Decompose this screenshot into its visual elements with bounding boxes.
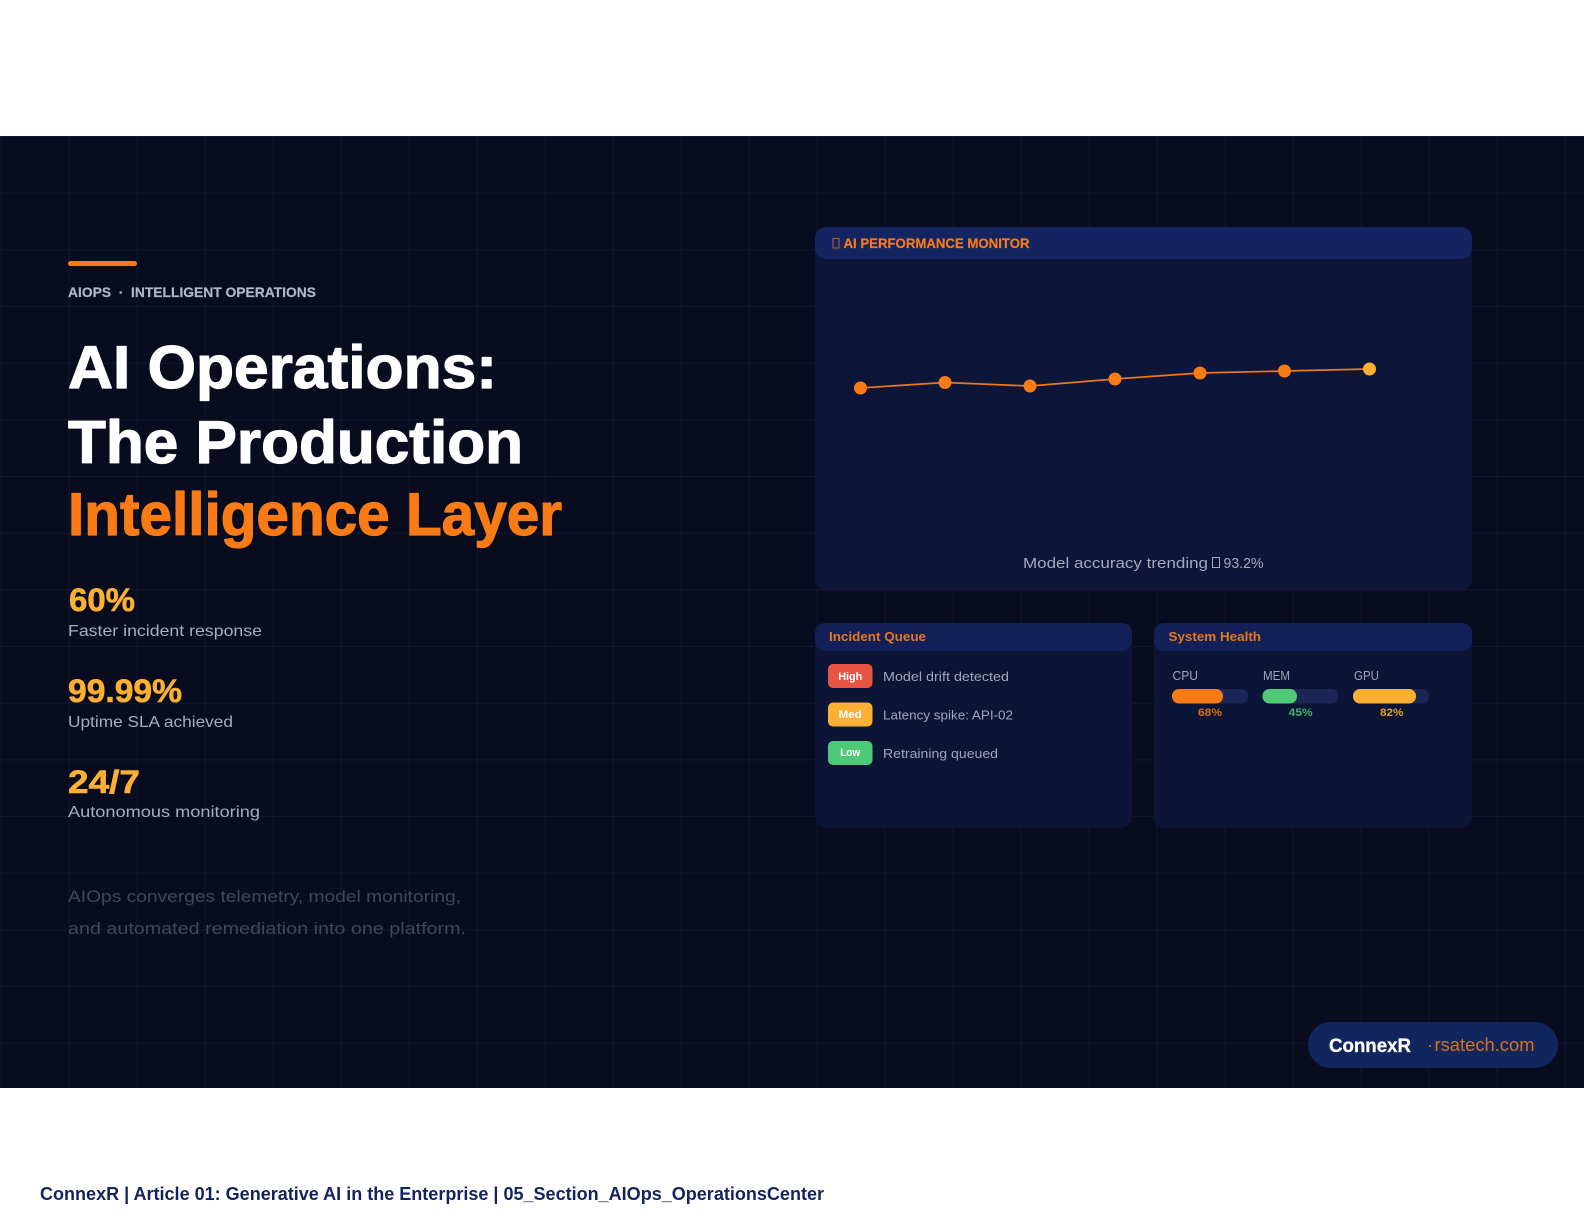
brand pill: ConnexR: [1329, 1036, 1411, 1057]
gauge: MEM: [1262, 668, 1338, 719]
stat: uptime SLA: Uptime SLA achieved: [68, 714, 233, 731]
eyebrow label: AIOPS · INTELLIGENT OPERATIONS: [68, 284, 316, 300]
panel: AI performance monitor: [815, 227, 1472, 590]
incident row: high: Model drift detected: [883, 669, 1009, 684]
brand pill: ·: [1427, 1035, 1433, 1055]
incident row: low: Retraining queued: [883, 746, 998, 761]
gauge: CPU: 68%: [1198, 707, 1222, 719]
title: The Production: [68, 409, 523, 476]
panel heading: Incident Queue: [829, 630, 926, 644]
title: Intelligence Layer: [68, 481, 562, 548]
line chart: model accuracy: [854, 362, 1376, 394]
title: AI Operations:: [68, 334, 497, 401]
panel: incident queue: [815, 623, 1132, 828]
panel header: [815, 227, 1472, 259]
stat: faster incident response: 60%: [69, 582, 135, 618]
chart caption: Model accuracy trending: [1023, 555, 1208, 572]
title: [68, 334, 562, 548]
stat: uptime SLA: 99.99%: [68, 673, 182, 709]
gauge: GPU: GPU: [1354, 668, 1379, 683]
incident row: high: High: [838, 671, 862, 683]
gauge: GPU: 82%: [1380, 707, 1404, 719]
panel header: [1154, 623, 1472, 651]
panel heading: System Health: [1168, 630, 1261, 644]
description paragraph: and automated remediation into one platform.: [68, 919, 466, 938]
incident row: low: [828, 741, 998, 765]
icon: missing glyph box: [833, 238, 839, 248]
incident row: high: [828, 664, 1009, 688]
stat: faster incident response: [68, 582, 262, 640]
chart caption: [1023, 555, 1264, 572]
panel header: [815, 623, 1132, 651]
panel heading: AI PERFORMANCE MONITOR: [844, 235, 1030, 251]
gauge: CPU: CPU: [1172, 668, 1198, 683]
dark slide background: [0, 136, 1584, 1088]
incident row: medium: [828, 702, 1013, 726]
description paragraph: AIOps converges telemetry, model monitoring,: [68, 887, 461, 906]
stat: faster incident response: Faster incident response: [68, 623, 262, 640]
brand pill: rsatech.com: [1434, 1035, 1534, 1055]
gauge: CPU: [1172, 668, 1248, 719]
chart caption: 93.2%: [1224, 555, 1264, 572]
stat: autonomous monitoring: [68, 764, 260, 821]
footer caption: ConnexR | Article 01: Generative AI in the Enterprise | 05_Section_AIOps_OperationsCenter: [40, 1184, 824, 1204]
stat: autonomous monitoring: Autonomous monitoring: [68, 804, 260, 821]
gauge: GPU: [1353, 668, 1429, 719]
incident row: medium: Med: [839, 709, 862, 721]
gauge: MEM: MEM: [1263, 668, 1290, 683]
panel: system health: [1154, 623, 1472, 828]
accent bar: [68, 261, 137, 266]
brand pill: [1308, 1022, 1558, 1068]
stat: uptime SLA: [68, 673, 233, 731]
gauge: MEM: 45%: [1289, 707, 1313, 719]
incident row: low: Low: [840, 747, 861, 759]
stat: autonomous monitoring: 24/7: [68, 764, 140, 800]
incident row: medium: Latency spike: API-02: [883, 708, 1013, 722]
description paragraph: [68, 887, 466, 938]
